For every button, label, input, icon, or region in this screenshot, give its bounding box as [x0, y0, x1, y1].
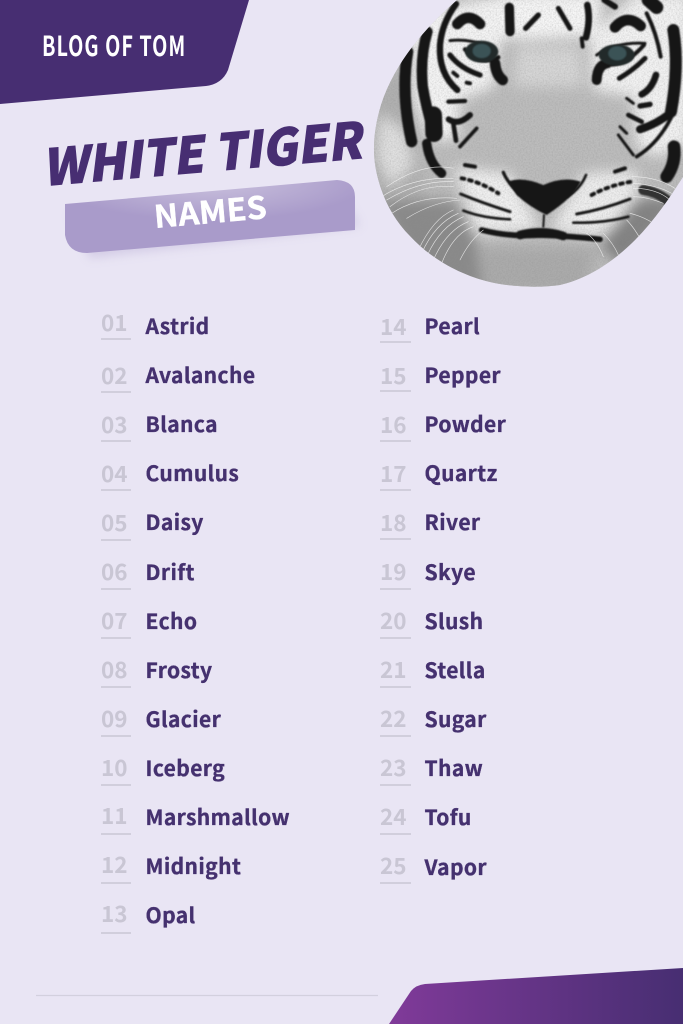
entry 21: 21 — [380, 653, 407, 685]
entry 21: Stella — [424, 655, 486, 685]
entry 20 — [380, 604, 483, 638]
entry 15: 15 — [380, 359, 407, 391]
entry 18 — [380, 506, 481, 539]
footer banner — [389, 968, 683, 1024]
entry 16: 16 — [380, 408, 407, 440]
entry 01 — [101, 306, 210, 341]
entry 05 — [101, 506, 204, 540]
entry 14: Pearl — [424, 311, 480, 341]
entry 17 — [380, 457, 498, 490]
entry 07 — [101, 604, 197, 638]
entry 18: 18 — [380, 506, 407, 538]
entry 08: 08 — [101, 653, 128, 685]
entry 19: Skye — [424, 557, 476, 587]
footer rule — [36, 994, 378, 996]
entry 16: Powder — [424, 409, 507, 439]
entry 12: 12 — [101, 848, 128, 880]
entry 25: 25 — [380, 849, 407, 881]
entry 06 — [101, 555, 195, 589]
subtitle ribbon: Names — [65, 180, 360, 258]
entry 07: Echo — [146, 606, 197, 636]
entry 22: 22 — [380, 702, 407, 734]
entry 15 — [380, 359, 501, 391]
entry 20: Slush — [424, 606, 483, 636]
entry 25: Vapor — [424, 852, 487, 882]
entry 01: Astrid — [144, 311, 210, 341]
tiger face photo — [363, 0, 683, 293]
entry 08: Frosty — [146, 655, 212, 685]
entry 05: 05 — [101, 506, 128, 538]
entry 17: Quartz — [424, 458, 498, 488]
entry 02: 02 — [101, 359, 128, 391]
entry 22: Sugar — [424, 704, 487, 734]
entry 06: Drift — [146, 557, 195, 587]
entry 16 — [380, 408, 507, 441]
entry 13 — [101, 897, 196, 933]
entry 09 — [101, 702, 222, 736]
entry 23: 23 — [380, 751, 407, 783]
entry 13: Opal — [146, 900, 196, 930]
entry 24: 24 — [380, 800, 407, 832]
entry 09: 09 — [101, 702, 128, 734]
entry 02 — [101, 359, 255, 392]
entry 19: 19 — [380, 555, 407, 587]
entry 11 — [101, 799, 290, 834]
entry 10 — [101, 751, 225, 785]
entry 08 — [101, 653, 212, 687]
entry 12: Midnight — [146, 851, 241, 881]
entry 07: 07 — [101, 604, 128, 636]
header banner — [0, 0, 249, 104]
entry 22 — [380, 702, 487, 736]
name list: column 1 — [101, 306, 290, 933]
entry 13: 13 — [101, 897, 128, 929]
entry 24: Tofu — [424, 802, 472, 832]
entry 04: Cumulus — [146, 458, 239, 488]
entry 10: Iceberg — [146, 753, 225, 783]
fur texture — [370, 0, 683, 293]
entry 19 — [380, 555, 476, 589]
entry 25 — [380, 849, 487, 883]
entry 14: 14 — [380, 310, 407, 342]
soft tonal areas — [363, 0, 683, 293]
entry 10: 10 — [101, 751, 128, 783]
entry 18: River — [424, 507, 481, 537]
subtitle text: NAMES — [152, 182, 268, 237]
entry 03: Blanca — [146, 409, 218, 439]
brand name: BLOG OF TOM — [42, 24, 185, 64]
entry 01: 01 — [101, 306, 128, 338]
entry 24 — [380, 800, 472, 834]
entry 15: Pepper — [424, 360, 501, 390]
fur stripes — [405, 0, 676, 239]
entry 05: Daisy — [146, 507, 204, 537]
entry 04 — [101, 457, 239, 490]
entry 03: 03 — [101, 408, 128, 440]
eyes — [465, 41, 635, 66]
name list: column 2 — [380, 310, 507, 883]
entry 02: Avalanche — [144, 360, 255, 390]
entry 06: 06 — [101, 555, 128, 587]
entry 11: 11 — [101, 799, 128, 831]
entry 12 — [101, 848, 241, 883]
entry 20: 20 — [380, 604, 407, 636]
entry 04: 04 — [101, 457, 128, 489]
entry 21 — [380, 653, 486, 687]
entry 23: Thaw — [424, 753, 483, 783]
nose — [508, 179, 581, 215]
entry 03 — [101, 408, 218, 441]
title: White Tiger: WHITE TIGER — [42, 99, 370, 201]
entry 09: Glacier — [146, 704, 222, 734]
entry 23 — [380, 751, 483, 785]
whiskers — [382, 167, 675, 263]
entry 17: 17 — [380, 457, 407, 489]
entry 11: Marshmallow — [146, 802, 290, 832]
entry 14 — [380, 310, 480, 342]
